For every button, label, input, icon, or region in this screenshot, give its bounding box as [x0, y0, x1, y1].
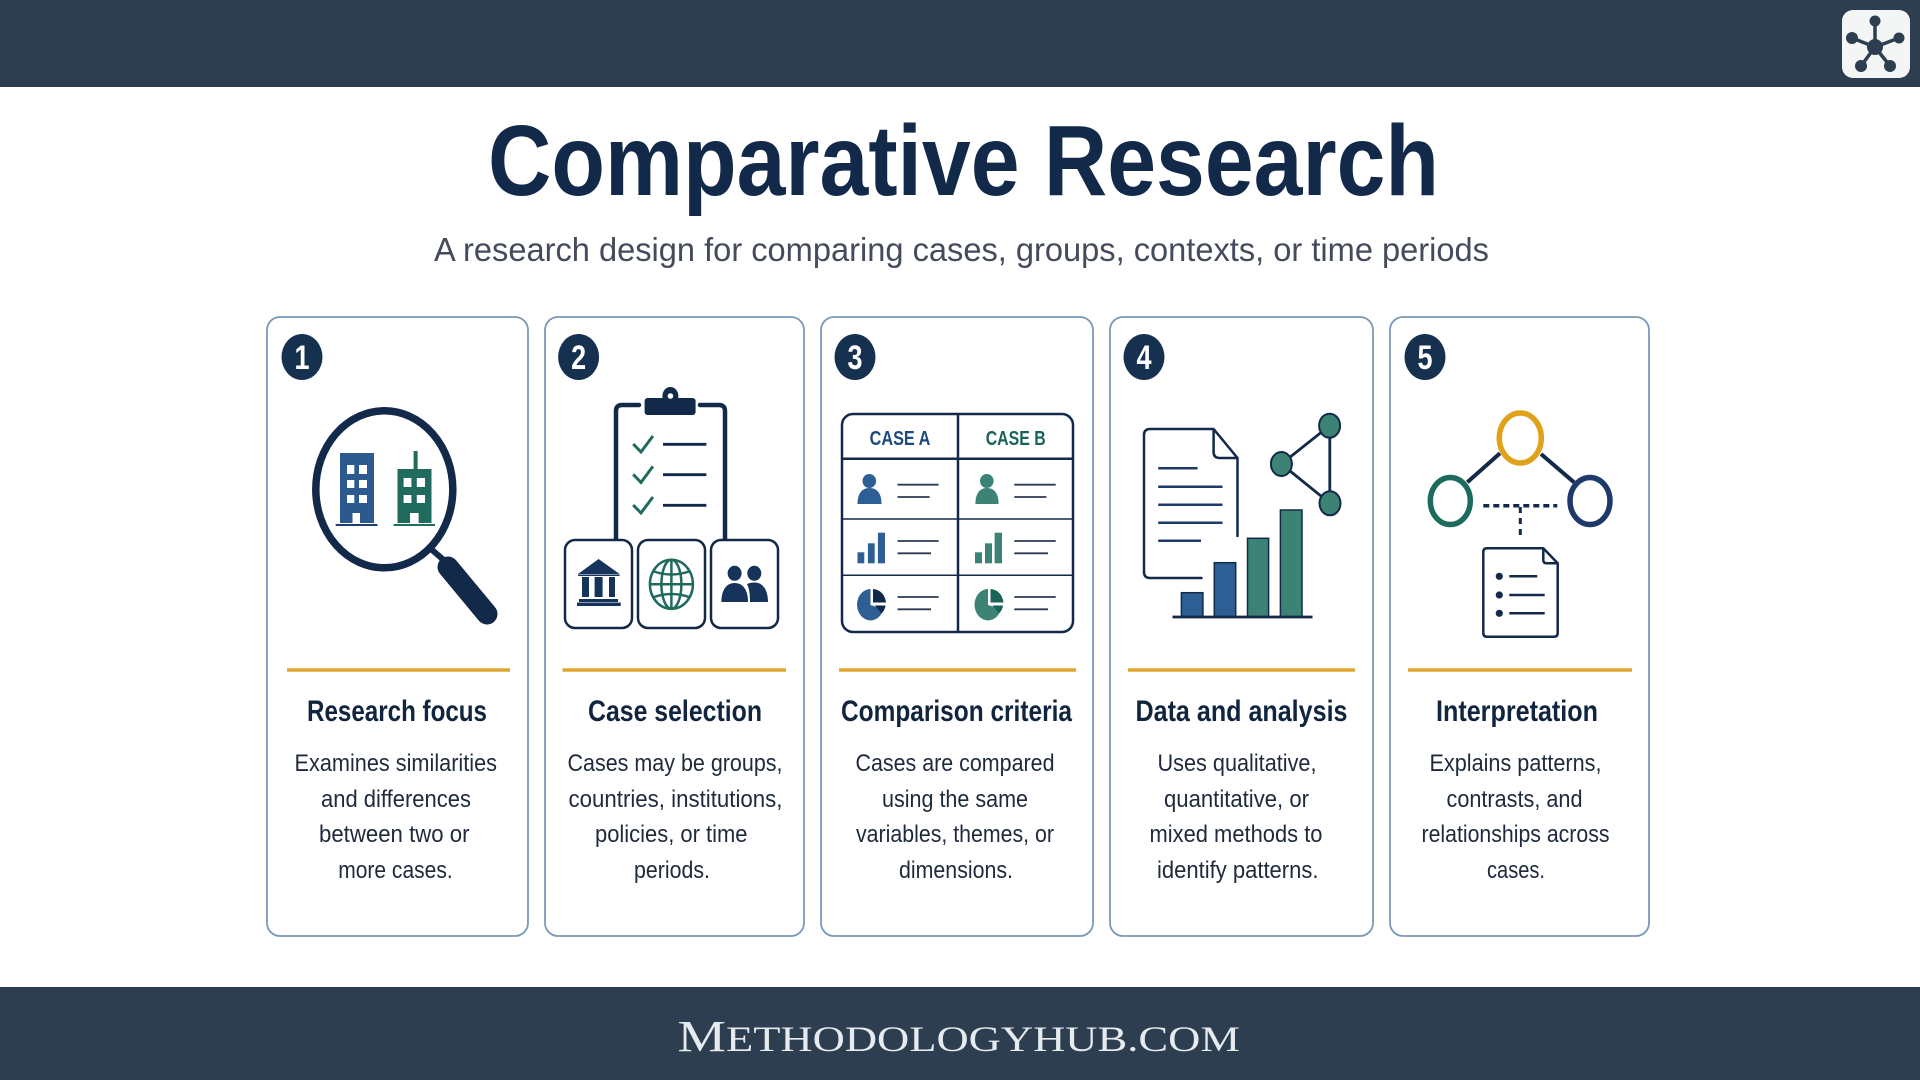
description	[1150, 750, 1322, 884]
number badge 2: 2	[571, 339, 586, 377]
heading: Research focus	[307, 695, 487, 728]
icon: network logo	[1842, 10, 1910, 78]
description: dimensions.	[899, 857, 1013, 884]
heading: Data and analysis	[1136, 695, 1348, 728]
heading: Interpretation	[1436, 695, 1598, 728]
number badge 1: 1	[294, 339, 310, 377]
icon: clipboard checklist with three case boxes	[565, 387, 778, 628]
description	[1422, 750, 1610, 884]
description	[568, 750, 782, 884]
top header bar	[0, 0, 1920, 87]
description: Cases are compared	[856, 750, 1054, 777]
subtitle: A research design for comparing cases, groups, contexts, or time periods	[434, 231, 1489, 268]
panel: case selection	[545, 317, 804, 936]
description: relationships across	[1422, 821, 1610, 848]
description	[856, 750, 1054, 884]
divider	[839, 668, 1076, 672]
panel: data and analysis	[1110, 317, 1373, 936]
footer website text: M ETHODOLOGYHUB.COM	[678, 1012, 1240, 1061]
number badge 4: 4	[1136, 339, 1152, 377]
description: cases.	[1487, 857, 1545, 884]
number badge 3	[834, 334, 876, 380]
description: contrasts, and	[1446, 786, 1582, 813]
icon: case A versus case B comparison table: CASE A	[870, 427, 931, 450]
description: quantitative, or	[1164, 786, 1309, 813]
description: countries, institutions,	[568, 786, 782, 813]
description: policies, or time	[595, 821, 748, 848]
icon: linked circles and summary document	[1430, 413, 1610, 637]
divider	[1128, 668, 1355, 672]
divider	[562, 668, 786, 672]
description: more cases.	[338, 857, 453, 884]
number badge 1	[282, 334, 322, 380]
description: Uses qualitative,	[1158, 750, 1316, 777]
number badge 4	[1124, 334, 1164, 380]
description: Examines similarities	[294, 750, 497, 777]
icon: case A versus case B comparison table: CASE B	[986, 427, 1046, 450]
icon: magnifying glass over two buildings	[316, 411, 487, 614]
number badge 3: 3	[848, 339, 862, 377]
panel: research focus	[267, 317, 528, 936]
heading: Comparison criteria	[841, 695, 1072, 728]
description: identify patterns.	[1157, 857, 1318, 884]
divider	[1408, 668, 1632, 672]
icon: document, bar chart and network	[1144, 414, 1340, 617]
description: between two or	[319, 821, 470, 848]
description	[294, 750, 497, 884]
heading: Case selection	[588, 695, 762, 728]
panel: interpretation	[1390, 317, 1649, 936]
icon: case A versus case B comparison table	[842, 414, 1073, 632]
number badge 5: 5	[1418, 339, 1432, 377]
footer bar	[0, 987, 1920, 1080]
description: mixed methods to	[1150, 821, 1322, 848]
number badge 5	[1404, 334, 1446, 380]
panel: comparison criteria	[821, 317, 1093, 936]
divider	[287, 668, 510, 672]
number badge 2	[558, 334, 599, 380]
description: periods.	[634, 857, 710, 884]
title: Comparative Research	[488, 105, 1439, 217]
description: and differences	[321, 786, 471, 813]
description: using the same	[882, 786, 1028, 813]
description: Cases may be groups,	[568, 750, 782, 777]
description: variables, themes, or	[856, 821, 1054, 848]
description: Explains patterns,	[1430, 750, 1602, 777]
